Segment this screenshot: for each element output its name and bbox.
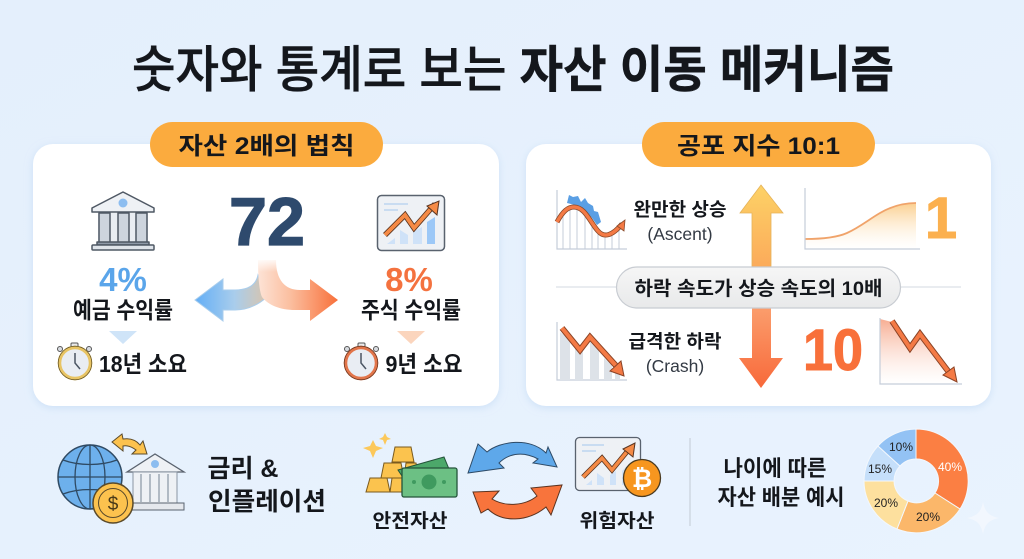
heading badge: rule of doubling: 자산 2배의 법칙 — [178, 133, 354, 160]
text: ascent label: (Ascent) — [647, 224, 713, 244]
segment 20% yellow — [864, 481, 908, 529]
text: rates and inflation: 인플레이션 — [208, 488, 326, 516]
text: allocation by age: 나이에 따른 — [724, 456, 826, 481]
panel: fear index — [526, 122, 991, 406]
icon: risk asset chart with bitcoin: ₿ — [632, 465, 652, 493]
big number 72: 72 — [229, 184, 305, 260]
text: ascent label — [634, 199, 726, 244]
icon: globe, bank, coin — [58, 434, 184, 523]
arrow: up and down divided by pill — [739, 185, 783, 388]
text: 9 years: 9년 소요 — [386, 351, 462, 377]
label: deposit rate: 예금 수익률 — [73, 297, 173, 323]
icon: bank — [92, 192, 154, 250]
section: rates and inflation — [58, 434, 326, 523]
icon: sparkle watermark — [967, 502, 999, 534]
icon: crash small chart — [557, 322, 627, 380]
segment 20% orange — [897, 493, 960, 533]
vertical divider — [689, 438, 691, 526]
donut labels: 20% — [916, 510, 940, 524]
text: crash label: 급격한 하락 — [628, 331, 722, 352]
icon: risk asset chart with bitcoin — [576, 438, 660, 496]
text: safe assets: 안전자산 — [372, 510, 448, 532]
arrow: split left blue — [195, 275, 267, 321]
text: crash label: (Crash) — [646, 356, 704, 376]
segment 10% — [878, 429, 916, 466]
deposit rate 4%: 4% — [99, 261, 147, 298]
callout pill — [616, 267, 900, 308]
stock rate 8%: 8% — [385, 261, 433, 298]
icon: globe, bank, coin: $ — [108, 494, 119, 515]
callout pill: 하락 속도가 상승 속도의 10배 — [634, 278, 882, 300]
segment 15% — [864, 446, 900, 481]
section: safe and risk assets — [363, 433, 660, 532]
arrow: blue cycle — [468, 442, 557, 473]
icon: stopwatch gold — [58, 343, 92, 380]
arrow: orange cycle — [473, 485, 562, 519]
text: allocation by age: 자산 배분 예시 — [718, 485, 844, 510]
text: rates and inflation — [208, 455, 326, 516]
heading badge: rule of doubling — [150, 122, 383, 167]
icon: ascent chart — [557, 190, 627, 249]
icon: stock chart — [378, 196, 444, 250]
donut labels: 20% — [874, 496, 898, 510]
triangle: orange pointer — [397, 331, 425, 344]
panel: rule of doubling — [33, 122, 499, 406]
icon: gentle curve chart — [805, 188, 920, 249]
heading badge: fear index: 공포 지수 10:1 — [677, 133, 840, 160]
segment 40% — [916, 429, 968, 509]
text: allocation by age — [718, 456, 844, 510]
heading badge: fear index — [642, 122, 875, 167]
icon: gold and cash — [363, 433, 457, 497]
text: 18 years: 18년 소요 — [99, 351, 187, 377]
text: crash label — [628, 331, 722, 376]
label: stock rate: 주식 수익률 — [361, 297, 461, 323]
text: ascent label: 완만한 상승 — [634, 199, 726, 220]
donut labels: 15% — [868, 462, 892, 476]
text: risk assets: 위험자산 — [580, 510, 654, 532]
number 10: 10 — [803, 318, 863, 383]
number 1: 1 — [925, 186, 957, 251]
text: rates and inflation: 금리 & — [208, 455, 278, 483]
title: 숫자와 통계로 보는 자산 이동 메커니즘 — [132, 42, 894, 98]
donut labels: 40% — [938, 460, 962, 474]
divider line — [556, 286, 961, 288]
triangle: blue pointer — [109, 331, 137, 344]
icon: stopwatch orange — [344, 343, 378, 380]
icon: crash large chart — [880, 318, 962, 384]
donut labels: 10% — [889, 440, 913, 454]
arrow: split right orange — [256, 258, 338, 321]
donut labels — [868, 440, 962, 524]
donut chart: asset allocation — [864, 429, 968, 533]
